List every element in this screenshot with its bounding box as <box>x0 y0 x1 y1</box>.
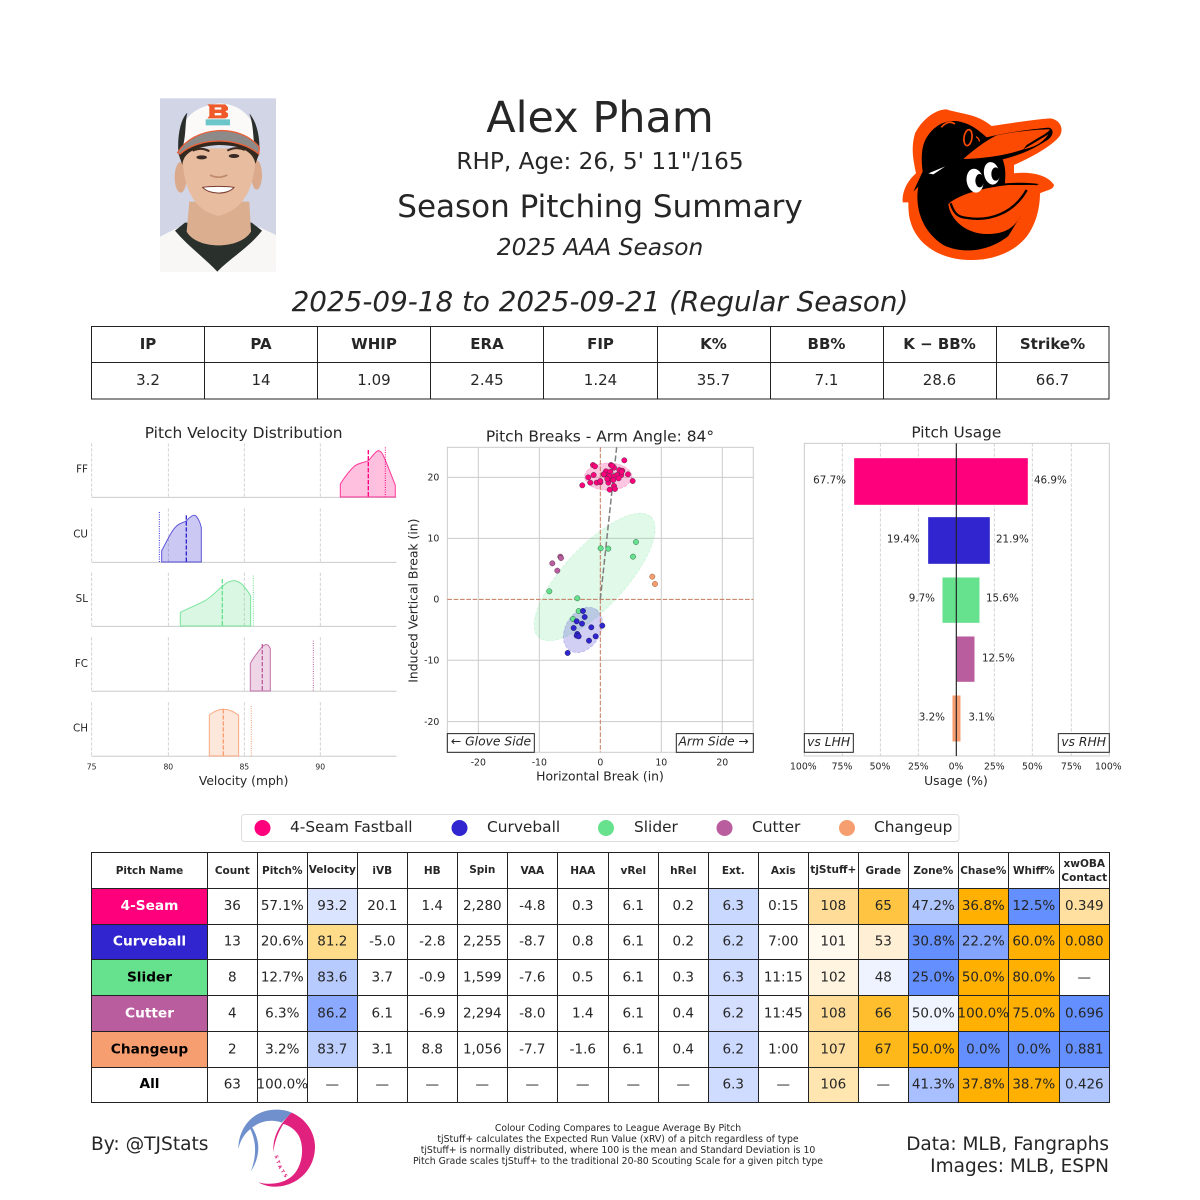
pitch usage chart <box>790 423 1122 788</box>
glove side label <box>447 734 534 752</box>
row: All: 100.0% <box>257 1076 308 1092</box>
FF density <box>76 447 397 497</box>
usage value labels: 67.7% <box>813 475 846 487</box>
row: 4-Seam: 20.1 <box>367 898 397 914</box>
season stats table: 28.6 <box>923 371 956 389</box>
footer data sources: Images: MLB, ESPN <box>930 1156 1109 1177</box>
row: 4-Seam: 0.349 <box>1065 898 1104 914</box>
velocity tick labels: 75 <box>87 763 97 772</box>
season stats table <box>92 326 1109 399</box>
row: 4-Seam: 0:15 <box>768 898 798 914</box>
row: Curveball: 6.1 <box>623 934 644 950</box>
usage tick labels: 75% <box>1061 762 1082 773</box>
row: All: — <box>326 1076 339 1092</box>
usage tick labels <box>790 762 1122 773</box>
season stats table: Strike% <box>1020 335 1085 353</box>
row: Cutter <box>92 996 1110 1032</box>
season stats table: K − BB% <box>903 335 976 353</box>
glove side label: ← Glove Side <box>451 735 532 749</box>
row: Cutter: 1.4 <box>572 1006 594 1022</box>
row: Cutter: 0.696 <box>1065 1006 1104 1022</box>
row: Curveball: 22.2% <box>962 934 1005 950</box>
row: Slider: 25.0% <box>912 970 955 986</box>
footer notes on colour coding: Pitch Grade scales tjStuff+ to the traditional 20-80 Scouting Scale for a given pitch type <box>413 1156 823 1167</box>
row: Slider: 12.7% <box>261 970 304 986</box>
row: Changeup: 83.7 <box>317 1042 347 1058</box>
table header row: xwOBA <box>1064 858 1106 870</box>
usage tick labels: 0% <box>949 762 964 773</box>
row: 4-Seam: 6.3 <box>723 898 744 914</box>
row: 4-Seam <box>92 888 1110 924</box>
row: Curveball: -8.7 <box>519 934 545 950</box>
icon: TJStats logo: A <box>276 1164 283 1171</box>
arm side label <box>676 734 753 752</box>
SL density: SL <box>76 593 88 605</box>
table header row: Velocity <box>309 864 356 876</box>
row: 4-Seam: 57.1% <box>261 898 304 914</box>
usage tick labels: 25% <box>984 762 1005 773</box>
table header row: Axis <box>771 865 796 877</box>
row: Curveball: 53 <box>875 934 892 950</box>
CH density: CH <box>73 723 88 735</box>
table header row: Grade <box>866 865 901 877</box>
usage value labels: 3.1% <box>968 711 995 723</box>
row: Curveball: Curveball <box>113 934 186 950</box>
date range: 2025-09-18 to 2025-09-21 (Regular Season) <box>292 285 908 318</box>
vs LHH label: vs LHH <box>807 735 850 749</box>
row: 4-Seam: 4-Seam <box>121 898 178 914</box>
season stats table: 1.24 <box>584 371 617 389</box>
breaks tick labels: 0 <box>433 595 439 606</box>
pitch type legend: 4-Seam Fastball <box>290 818 413 836</box>
row: Cutter: 100.0% <box>958 1006 1009 1022</box>
row: Cutter: -8.0 <box>519 1006 545 1022</box>
usage value labels: 9.7% <box>909 593 935 605</box>
row: Cutter: 0.4 <box>673 1006 694 1022</box>
row: All: 38.7% <box>1012 1076 1055 1092</box>
row: Slider: -0.9 <box>419 970 445 986</box>
row: All: 0.426 <box>1065 1076 1104 1092</box>
table header row <box>116 858 1107 884</box>
footer notes on colour coding: tjStuff+ is normally distributed, where 100 is the mean and Standard Deviation is 10 <box>421 1145 815 1156</box>
velocity distribution chart <box>73 424 397 788</box>
icon: TJStats logo: S <box>282 1173 289 1180</box>
footer notes on colour coding <box>413 1123 823 1167</box>
row: Cutter: Cutter <box>125 1006 174 1022</box>
velocity axis grid <box>92 443 320 756</box>
row: Changeup: 0.0% <box>1017 1042 1051 1058</box>
row: 4-Seam: 65 <box>875 898 892 914</box>
pitch type legend: Curveball <box>487 818 560 836</box>
row: Curveball: -5.0 <box>369 934 395 950</box>
breaks tick labels: 20 <box>427 473 439 484</box>
row: Curveball: 6.2 <box>723 934 744 950</box>
vs RHH label: vs RHH <box>1061 735 1106 749</box>
row: Changeup: Changeup <box>111 1042 188 1058</box>
row: Curveball: 20.6% <box>261 934 304 950</box>
table header row: vRel <box>620 865 646 877</box>
row: Cutter: 11:45 <box>764 1006 803 1022</box>
FC density <box>75 641 397 691</box>
row: All: — <box>877 1076 890 1092</box>
usage value labels <box>813 475 1067 723</box>
table header row: Ext. <box>722 865 745 877</box>
season stats table: 14 <box>251 371 271 389</box>
table header row: Pitch Name <box>116 865 183 877</box>
table header row: Pitch% <box>262 865 303 877</box>
icon: TJStats logo: T <box>274 1160 281 1166</box>
row: Slider <box>92 960 1091 996</box>
table header row: Spin <box>469 864 495 876</box>
row: Slider: 48 <box>875 970 892 986</box>
usage tick labels: 25% <box>908 762 929 773</box>
report title: Season Pitching Summary <box>397 189 803 225</box>
headshot photo <box>160 98 276 272</box>
velocity tick labels: 85 <box>239 763 249 772</box>
row: 4-Seam: 2,280 <box>463 898 502 914</box>
CU density: CU <box>73 529 88 541</box>
FF density: FF <box>76 464 88 476</box>
season stats table: ERA <box>470 335 504 353</box>
usage frame and grid <box>804 443 1109 756</box>
row: Slider: 1,599 <box>463 970 502 986</box>
row: Changeup: -1.6 <box>570 1042 596 1058</box>
pitch metrics table <box>92 852 1110 1102</box>
row: All: — <box>376 1076 389 1092</box>
breaks tick labels: -20 <box>424 717 439 728</box>
footer data sources <box>906 1134 1109 1177</box>
season stats table: WHIP <box>351 335 397 353</box>
row: Cutter: 86.2 <box>317 1006 347 1022</box>
row: Slider: Slider <box>127 970 172 986</box>
row: Changeup: 50.0% <box>912 1042 955 1058</box>
usage value labels: 19.4% <box>887 534 920 546</box>
breaks tick labels: 10 <box>427 534 439 545</box>
row: All: — <box>576 1076 590 1092</box>
season stats table: BB% <box>808 335 845 353</box>
icon: TJStats logo: S <box>273 1154 280 1160</box>
table header row: Contact <box>1061 872 1107 884</box>
icon: TJStats logo: T <box>279 1169 286 1175</box>
pitch type legend <box>242 814 959 842</box>
CU density <box>73 512 397 562</box>
usage tick labels: 100% <box>790 762 817 773</box>
row: 4-Seam: 47.2% <box>912 898 955 914</box>
FC density: FC <box>75 658 88 670</box>
4-seam points <box>580 458 635 492</box>
row: Slider: 8 <box>228 970 237 986</box>
season stats table: IP <box>140 335 156 353</box>
center line <box>955 443 958 756</box>
row: Curveball: 0.2 <box>673 934 694 950</box>
row: All: — <box>426 1076 439 1092</box>
row: All: 6.3 <box>723 1076 744 1092</box>
season stats table: FIP <box>587 335 614 353</box>
table header row: tjStuff+ <box>810 864 856 876</box>
row: Changeup: 3.2% <box>265 1042 300 1058</box>
row: Curveball: 30.8% <box>912 934 955 950</box>
vs RHH label <box>1058 734 1109 752</box>
vs LHH label <box>804 734 853 752</box>
row: Cutter: 6.3% <box>265 1006 300 1022</box>
row: Cutter: 4 <box>228 1006 237 1022</box>
velocity tick labels <box>87 763 325 772</box>
row: 4-Seam: 12.5% <box>1012 898 1055 914</box>
row: 4-Seam: 0.2 <box>673 898 694 914</box>
row: Changeup: 0.0% <box>966 1042 1001 1058</box>
row: 4-Seam: 36 <box>224 898 241 914</box>
row: Cutter: 75.0% <box>1012 1006 1055 1022</box>
breaks tick labels: -20 <box>471 758 486 769</box>
chart title: velocity: Pitch Velocity Distribution <box>145 424 343 442</box>
row: All <box>140 1068 1110 1102</box>
row: Changeup: 107 <box>820 1042 846 1058</box>
footer data sources: Data: MLB, Fangraphs <box>906 1134 1109 1155</box>
season subtitle: 2025 AAA Season <box>497 234 703 261</box>
pitch type legend: Slider <box>634 818 679 836</box>
pitch breaks chart <box>405 428 753 784</box>
row: Changeup: 6.2 <box>723 1042 744 1058</box>
row: Cutter: 2,294 <box>463 1006 502 1022</box>
usage value labels: 3.2% <box>919 711 945 723</box>
slider points <box>547 539 639 622</box>
row: Slider: 102 <box>820 970 846 986</box>
icon: TJStats logo <box>238 1110 315 1187</box>
usage value labels: 21.9% <box>996 534 1029 546</box>
row: Curveball: 81.2 <box>317 934 347 950</box>
row: 4-Seam: 108 <box>820 898 846 914</box>
pitch type legend: Cutter <box>752 818 801 836</box>
row: All: — <box>777 1076 790 1092</box>
season stats table: K% <box>700 335 727 353</box>
row: All: 63 <box>224 1076 241 1092</box>
usage bars <box>854 458 1028 742</box>
chart title: usage: Pitch Usage <box>911 423 1001 441</box>
pitch movement ellipses <box>516 463 673 660</box>
changeup points <box>650 574 658 587</box>
velocity tick labels: 90 <box>315 763 325 772</box>
usage value labels: 12.5% <box>982 653 1015 665</box>
row: Changeup: 1,056 <box>463 1042 502 1058</box>
row: Changeup: 2 <box>228 1042 237 1058</box>
usage tick labels: 50% <box>870 762 890 773</box>
pitch type legend: Changeup <box>874 818 952 836</box>
row: 4-Seam: 1.4 <box>422 898 443 914</box>
row: 4-Seam: 6.1 <box>623 898 644 914</box>
row: All: 106 <box>820 1076 846 1092</box>
curveball points <box>565 608 605 656</box>
breaks tick labels: 0 <box>597 758 603 769</box>
row: All: — <box>677 1076 690 1092</box>
breaks plot frame and grid <box>447 447 753 752</box>
breaks tick labels: 10 <box>655 758 667 769</box>
y axis label: vertical break: Induced Vertical Break (in) <box>405 519 420 683</box>
table header row: HB <box>424 865 441 877</box>
velocity tick labels: 80 <box>163 763 173 772</box>
table header row: HAA <box>570 865 596 877</box>
row: Curveball: 0.8 <box>572 934 594 950</box>
table header row: Count <box>215 865 250 877</box>
row: 4-Seam: 36.8% <box>962 898 1005 914</box>
usage axis label: Usage (%) <box>924 774 988 788</box>
x axis label: horizontal break: Horizontal Break (in) <box>536 769 664 784</box>
breaks tick labels: -10 <box>532 758 547 769</box>
row: All: — <box>476 1076 489 1092</box>
row: Changeup: 6.1 <box>623 1042 644 1058</box>
row: Changeup: 3.1 <box>372 1042 393 1058</box>
breaks tick labels: 20 <box>716 758 728 769</box>
usage tick labels: 75% <box>832 762 852 773</box>
row: 4-Seam: 93.2 <box>317 898 347 914</box>
row: Slider: — <box>1078 970 1091 986</box>
row: Slider: 0.3 <box>673 970 694 986</box>
row: Changeup: 67 <box>875 1042 892 1058</box>
footer notes on colour coding: tjStuff+ calculates the Expected Run Value (xRV) of a pitch regardless of type <box>437 1134 799 1145</box>
row: Cutter: 6.1 <box>372 1006 393 1022</box>
season stats table: 7.1 <box>815 371 838 389</box>
row: Cutter: 6.1 <box>623 1006 644 1022</box>
row: Cutter: 66 <box>875 1006 892 1022</box>
row: All: 37.8% <box>962 1076 1005 1092</box>
row: Cutter: 108 <box>820 1006 846 1022</box>
breaks tick labels <box>424 473 728 769</box>
row: Cutter: -6.9 <box>419 1006 445 1022</box>
season stats table: 3.2 <box>136 371 160 389</box>
row: Slider: 6.1 <box>623 970 644 986</box>
table header row: hRel <box>670 865 696 877</box>
table header row: Chase% <box>960 865 1007 877</box>
row: Slider: 3.7 <box>372 970 393 986</box>
player name: Alex Pham <box>486 93 714 143</box>
row: Changeup: 1:00 <box>768 1042 798 1058</box>
breaks tick labels: -10 <box>424 656 439 667</box>
table header row: Whiff% <box>1013 865 1055 877</box>
arm side label: Arm Side → <box>677 735 749 749</box>
row: Curveball: 60.0% <box>1012 934 1055 950</box>
row: All: — <box>526 1076 539 1092</box>
season stats table: PA <box>250 335 272 353</box>
row: Curveball: 7:00 <box>768 934 798 950</box>
row: Changeup: -7.7 <box>519 1042 545 1058</box>
row: Slider: 6.3 <box>723 970 744 986</box>
SL density <box>76 576 397 626</box>
velocity axis label: Velocity (mph) <box>199 774 288 788</box>
season stats table: 2.45 <box>470 371 504 389</box>
season stats table: 1.09 <box>357 371 391 389</box>
row: 4-Seam: 0.3 <box>572 898 594 914</box>
row: Curveball: -2.8 <box>419 934 445 950</box>
row: Curveball: 101 <box>820 934 846 950</box>
cutter points <box>550 554 564 573</box>
row: Changeup <box>92 1032 1110 1068</box>
row: Curveball: 13 <box>224 934 241 950</box>
usage value labels: 46.9% <box>1034 475 1067 487</box>
team logo: Orioles bird <box>903 109 1062 260</box>
row: Slider: -7.6 <box>519 970 545 986</box>
row: 4-Seam: -4.8 <box>519 898 545 914</box>
row: Cutter: 50.0% <box>912 1006 955 1022</box>
table header row: Zone% <box>913 865 954 877</box>
arm angle line <box>600 447 617 599</box>
row: Slider: 0.5 <box>572 970 594 986</box>
row: Curveball: 2,255 <box>463 934 502 950</box>
table header row: iVB <box>372 865 392 877</box>
table header row: VAA <box>520 865 545 877</box>
row: Cutter: 6.2 <box>723 1006 744 1022</box>
CH density <box>73 706 397 756</box>
row: Curveball: 0.080 <box>1065 934 1104 950</box>
row: All: 41.3% <box>912 1076 955 1092</box>
origin crosshair <box>447 447 753 752</box>
row: All: — <box>627 1076 640 1092</box>
row: Slider: 50.0% <box>962 970 1005 986</box>
usage tick labels: 100% <box>1095 762 1122 773</box>
row: Changeup: 0.881 <box>1065 1042 1104 1058</box>
chart title: breaks: Pitch Breaks - Arm Angle: 84° <box>486 428 714 446</box>
usage value labels: 15.6% <box>986 593 1019 605</box>
row: Slider: 80.0% <box>1012 970 1055 986</box>
season stats table: 35.7 <box>697 371 730 389</box>
row: All: All <box>140 1076 159 1092</box>
footer notes on colour coding: Colour Coding Compares to League Average By Pitch <box>495 1123 741 1134</box>
row: Slider: 83.6 <box>317 970 347 986</box>
usage tick labels: 50% <box>1022 762 1043 773</box>
row: Slider: 11:15 <box>764 970 803 986</box>
row: Changeup: 0.4 <box>673 1042 694 1058</box>
footer author credit: By: @TJStats <box>91 1134 208 1155</box>
row: Curveball <box>92 924 1110 960</box>
row: Changeup: 8.8 <box>422 1042 443 1058</box>
season stats table: 66.7 <box>1036 371 1069 389</box>
player bio: RHP, Age: 26, 5' 11"/165 <box>456 148 744 175</box>
